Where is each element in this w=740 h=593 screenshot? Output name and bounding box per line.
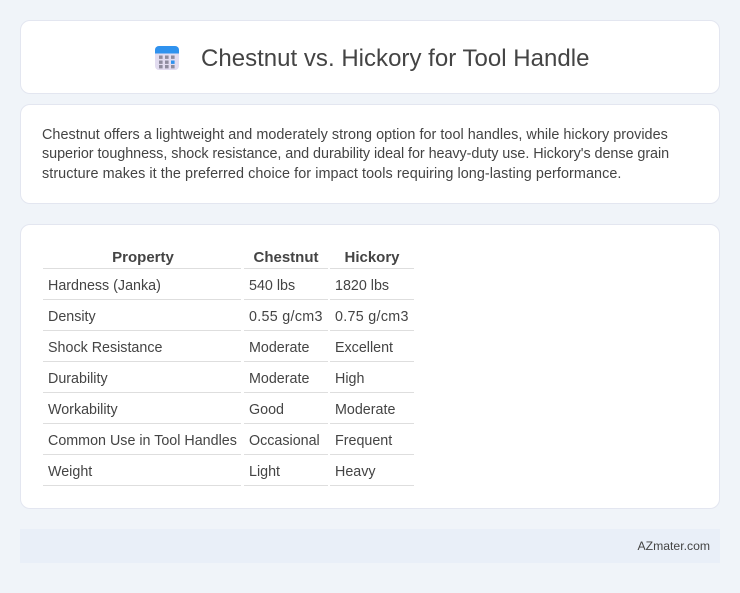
table header: Property: [112, 249, 174, 266]
icon: calendar: [155, 46, 179, 70]
row: hardness: [43, 278, 414, 300]
row: density: 0.55 g/cm3: [249, 309, 323, 325]
row: workability: Moderate: [335, 402, 395, 418]
row: durability: Moderate: [249, 371, 309, 387]
panel: comparison table: [20, 224, 720, 509]
row: shock resistance: Excellent: [335, 340, 393, 356]
table header: Hickory: [344, 249, 400, 266]
table: [43, 249, 414, 486]
row: shock resistance: Moderate: [249, 340, 309, 356]
row: common use: [43, 433, 414, 455]
footer text: AZmater.com: [638, 539, 710, 553]
row: workability: [43, 402, 414, 424]
row: density: [43, 309, 414, 331]
table header: Chestnut: [254, 249, 318, 266]
row: hardness: 1820 lbs: [335, 278, 389, 294]
row: weight: Heavy: [335, 464, 376, 480]
row: common use: Common Use in Tool Handles: [48, 433, 237, 449]
row: weight: Weight: [48, 464, 92, 480]
row: hardness: 540 lbs: [249, 278, 295, 294]
row: common use: Occasional: [249, 433, 320, 449]
row: weight: Light: [249, 464, 280, 480]
row: hardness: Hardness (Janka): [48, 278, 161, 294]
summary text: Chestnut offers a lightweight and moderately strong option for tool handles, while hickory provides: [42, 127, 668, 143]
panel: summary: [20, 104, 720, 204]
title: Chestnut vs. Hickory for Tool Handle: [201, 45, 589, 72]
row: density: 0.75 g/cm3: [335, 309, 409, 325]
summary text: [42, 127, 669, 182]
summary text: structure makes it the preferred choice for impact tools requiring long-lasting performance.: [42, 166, 621, 182]
row: common use: Frequent: [335, 433, 392, 449]
row: workability: Good: [249, 402, 284, 418]
summary text: superior toughness, shock resistance, and durability ideal for heavy-duty use. Hickory's dense grain: [42, 146, 669, 162]
row: workability: Workability: [48, 402, 118, 418]
header panel: [20, 20, 720, 94]
table header: [43, 249, 414, 269]
row: durability: [43, 371, 414, 393]
footer bar: [20, 529, 720, 563]
row: shock resistance: Shock Resistance: [48, 340, 162, 356]
row: durability: High: [335, 371, 364, 387]
row: shock resistance: [43, 340, 414, 362]
row: weight: [43, 464, 414, 486]
row: density: Density: [48, 309, 96, 325]
row: durability: Durability: [48, 371, 108, 387]
